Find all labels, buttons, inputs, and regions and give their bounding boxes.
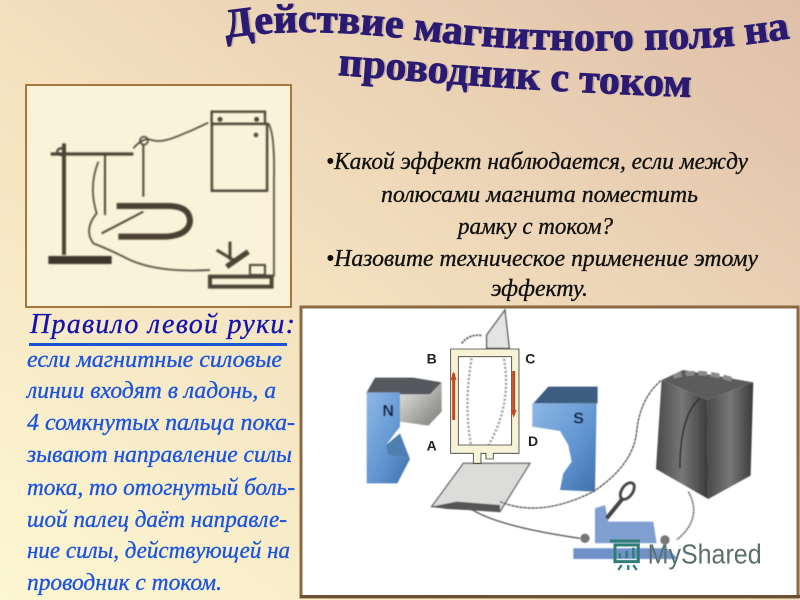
frame labels bbox=[427, 351, 538, 454]
watermark: MyShared bbox=[610, 538, 762, 570]
questions text block: •Какой эффект наблюдается, если между bbox=[326, 149, 748, 175]
frame labels: A bbox=[427, 438, 437, 454]
magnet N bbox=[367, 378, 442, 483]
magnet S: S bbox=[573, 411, 584, 428]
stand with wires and base bbox=[432, 310, 694, 540]
title: проводник с током bbox=[338, 56, 691, 98]
text block: left hand rule: шой палец даёт направле- bbox=[27, 507, 287, 533]
frame labels: C bbox=[525, 351, 535, 367]
text block: left hand rule: зывают направление силы bbox=[26, 442, 292, 468]
frame labels: B bbox=[427, 351, 437, 367]
text block: left hand rule: проводник с током. bbox=[27, 570, 222, 596]
text block: left hand rule bbox=[25, 347, 295, 596]
battery bbox=[656, 370, 753, 499]
rectangular frame ABCD bbox=[451, 349, 519, 463]
watermark: MyShared: MyShared bbox=[648, 538, 762, 569]
text block: left hand rule: тока, то отогнутый боль- bbox=[27, 475, 295, 501]
magnet N: N bbox=[382, 403, 394, 420]
questions text block: •Назовите техническое применение этому bbox=[326, 246, 758, 272]
title bbox=[226, 4, 792, 98]
text block: left hand rule: ние силы, действующей на bbox=[27, 538, 290, 564]
panel: apparatus diagram bbox=[300, 307, 800, 598]
text block: left hand rule: если магнитные силовые bbox=[27, 347, 282, 373]
text block: left hand rule: 4 сомкнутых пальца пока- bbox=[27, 410, 295, 436]
text block: left hand rule: линии входят в ладонь, а bbox=[25, 378, 276, 404]
questions text block bbox=[326, 149, 758, 302]
magnet S bbox=[532, 387, 598, 492]
switch bbox=[573, 480, 678, 559]
questions text block: рамку с током? bbox=[456, 214, 613, 240]
title: проводник с током bbox=[347, 58, 692, 97]
questions text block: эффекту. bbox=[491, 276, 588, 302]
heading: left hand rule: Правило левой руки: bbox=[29, 309, 295, 340]
questions text block: полюсами магнита поместить bbox=[381, 182, 698, 208]
frame labels: D bbox=[528, 433, 538, 449]
panel: sketch of experiment bbox=[26, 85, 291, 307]
